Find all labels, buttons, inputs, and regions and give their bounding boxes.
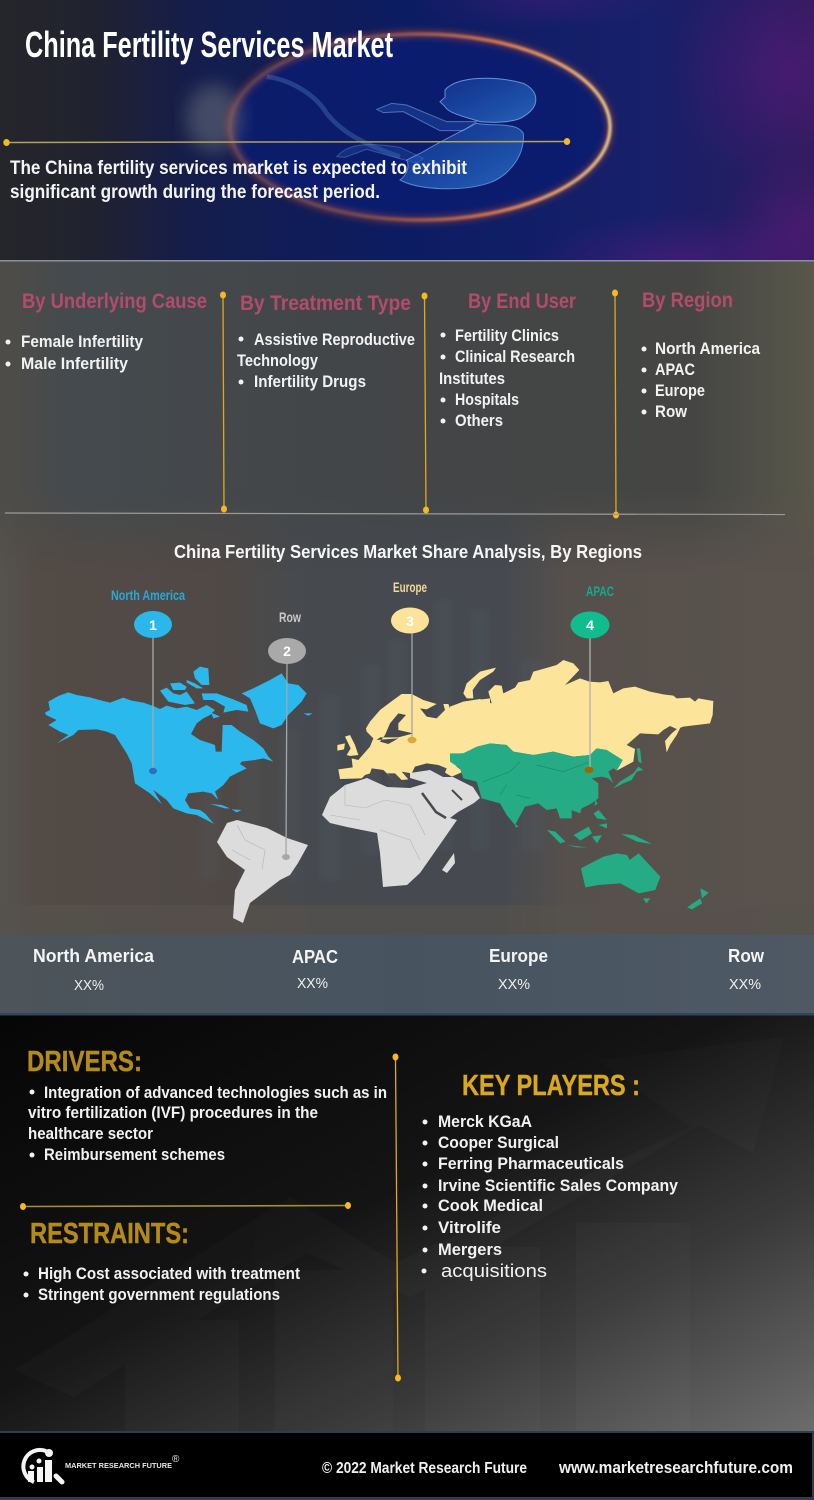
panel: regional shares band [0, 935, 814, 1016]
pin 4: apac [570, 583, 614, 773]
map: europe [337, 694, 490, 780]
panel: footer: MARKET RESEARCH FUTURE [65, 1461, 172, 1470]
map: asia pacific [450, 743, 709, 909]
panel: by end user: By End User [468, 289, 577, 313]
title: China Fertility Services Market [25, 24, 393, 65]
panel: by end user: Others [455, 412, 503, 430]
panel: by region [642, 288, 761, 421]
panel: by underlying cause: Female Infertility [21, 333, 144, 351]
pin 2: row [268, 609, 306, 860]
panel: by end user: Hospitals [455, 391, 519, 409]
panel: by treatment type: Technology [237, 352, 319, 370]
pin 2: row: Row [279, 609, 301, 625]
text: key players list: Cook Medical [438, 1197, 543, 1215]
panel: footer: © 2022 Market Research Future [322, 1460, 527, 1477]
panel: by end user: Institutes [439, 370, 505, 388]
panel: regional shares band: XX% [729, 976, 761, 993]
text: drivers list: healthcare sector [28, 1125, 154, 1143]
text: key players list: Merck KGaA [438, 1113, 532, 1131]
panel: by treatment type: Assistive Reproductive [254, 331, 415, 349]
text: drivers list [28, 1084, 387, 1164]
map: africa and middle east [322, 770, 480, 887]
header divider line [3, 138, 570, 146]
panel: by underlying cause [6, 289, 207, 373]
panel: by underlying cause: Male Infertility [21, 355, 129, 373]
text: key players list: Mergers [438, 1241, 502, 1259]
panel: by end user: Clinical Research [455, 348, 575, 366]
pin 4: apac: APAC [586, 583, 614, 599]
panel: by region: By Region [642, 288, 733, 312]
gold column dividers [220, 290, 619, 518]
text: key players list [422, 1113, 679, 1281]
panel: by treatment type: Infertility Drugs [254, 373, 366, 391]
text: restraints list [24, 1265, 300, 1304]
text: restraints list: Stringent government regulations [38, 1286, 280, 1304]
pin 1: north america [111, 587, 185, 774]
panel: footer: ® [172, 1454, 180, 1465]
icon: market research future logo [23, 1449, 62, 1482]
panel: by treatment type [237, 291, 415, 391]
panel: regional shares band: North America [33, 946, 155, 966]
panel: header banner [0, 0, 814, 312]
panel: footer: www.marketresearchfuture.com [558, 1458, 793, 1477]
panel: regional shares band: XX% [74, 977, 104, 994]
text: key players list: Vitrolife [438, 1219, 501, 1237]
pin 3: europe: Europe [393, 579, 427, 595]
text: key players list: Irvine Scientific Sales Company [438, 1177, 679, 1195]
text: key players list: acquisitions [441, 1261, 547, 1281]
panel: by region: North America [655, 340, 761, 358]
text: drivers list: Reimbursement schemes [44, 1146, 225, 1164]
text: drivers list: Integration of advanced technologies such as in [44, 1084, 387, 1102]
icon: fetus [267, 77, 536, 189]
text: key players list: Cooper Surgical [438, 1134, 559, 1152]
pin 4: apac: 4 [586, 617, 594, 633]
panel: by region: APAC [655, 361, 695, 379]
panel: footer [0, 1431, 814, 1500]
panel: regional shares band: APAC [292, 947, 338, 967]
text: restraints list: High Cost associated with treatment [38, 1265, 300, 1283]
heading: key players: KEY PLAYERS : [462, 1070, 640, 1102]
map: south america [217, 820, 308, 923]
panel: lower background [0, 1016, 814, 1432]
intro text: The China fertility services market is expected to exhibit [10, 158, 468, 179]
pin 1: north america: North America [111, 587, 185, 603]
pin 2: row: 2 [283, 643, 291, 659]
panel: by region: Row [655, 403, 687, 421]
chart: world map [45, 660, 713, 923]
panel: by end user [439, 289, 577, 430]
divider: vertical gold [392, 1054, 401, 1382]
panel: by treatment type: By Treatment Type [240, 291, 411, 315]
pin 1: north america: 1 [149, 617, 157, 633]
intro text [10, 158, 468, 203]
heading: drivers: DRIVERS: [27, 1046, 142, 1078]
panel: by underlying cause: By Underlying Cause [22, 289, 207, 313]
divider: drivers and restraints [20, 1202, 351, 1210]
map: russia [450, 660, 713, 771]
heading: restraints: RESTRAINTS: [30, 1218, 189, 1250]
intro text: significant growth during the forecast period. [10, 182, 380, 203]
pin 3: europe [391, 579, 429, 743]
pin 3: europe: 3 [406, 613, 414, 629]
panel: by end user: Fertility Clinics [455, 327, 559, 345]
panel: regional shares band: XX% [297, 975, 328, 992]
panel: regional shares band: Row [728, 946, 765, 966]
map: north america [45, 667, 313, 824]
text: key players list: Ferring Pharmaceuticals [438, 1155, 624, 1173]
panel: segmentation background [0, 260, 814, 935]
panel: regional shares band: Europe [489, 946, 548, 966]
heading: market share analysis: China Fertility Services Market Share Analysis, By Regions [174, 542, 642, 562]
panel: by region: Europe [655, 382, 705, 400]
text: drivers list: vitro fertilization (IVF) procedures in the [28, 1104, 318, 1122]
panel: regional shares band: XX% [498, 976, 530, 993]
